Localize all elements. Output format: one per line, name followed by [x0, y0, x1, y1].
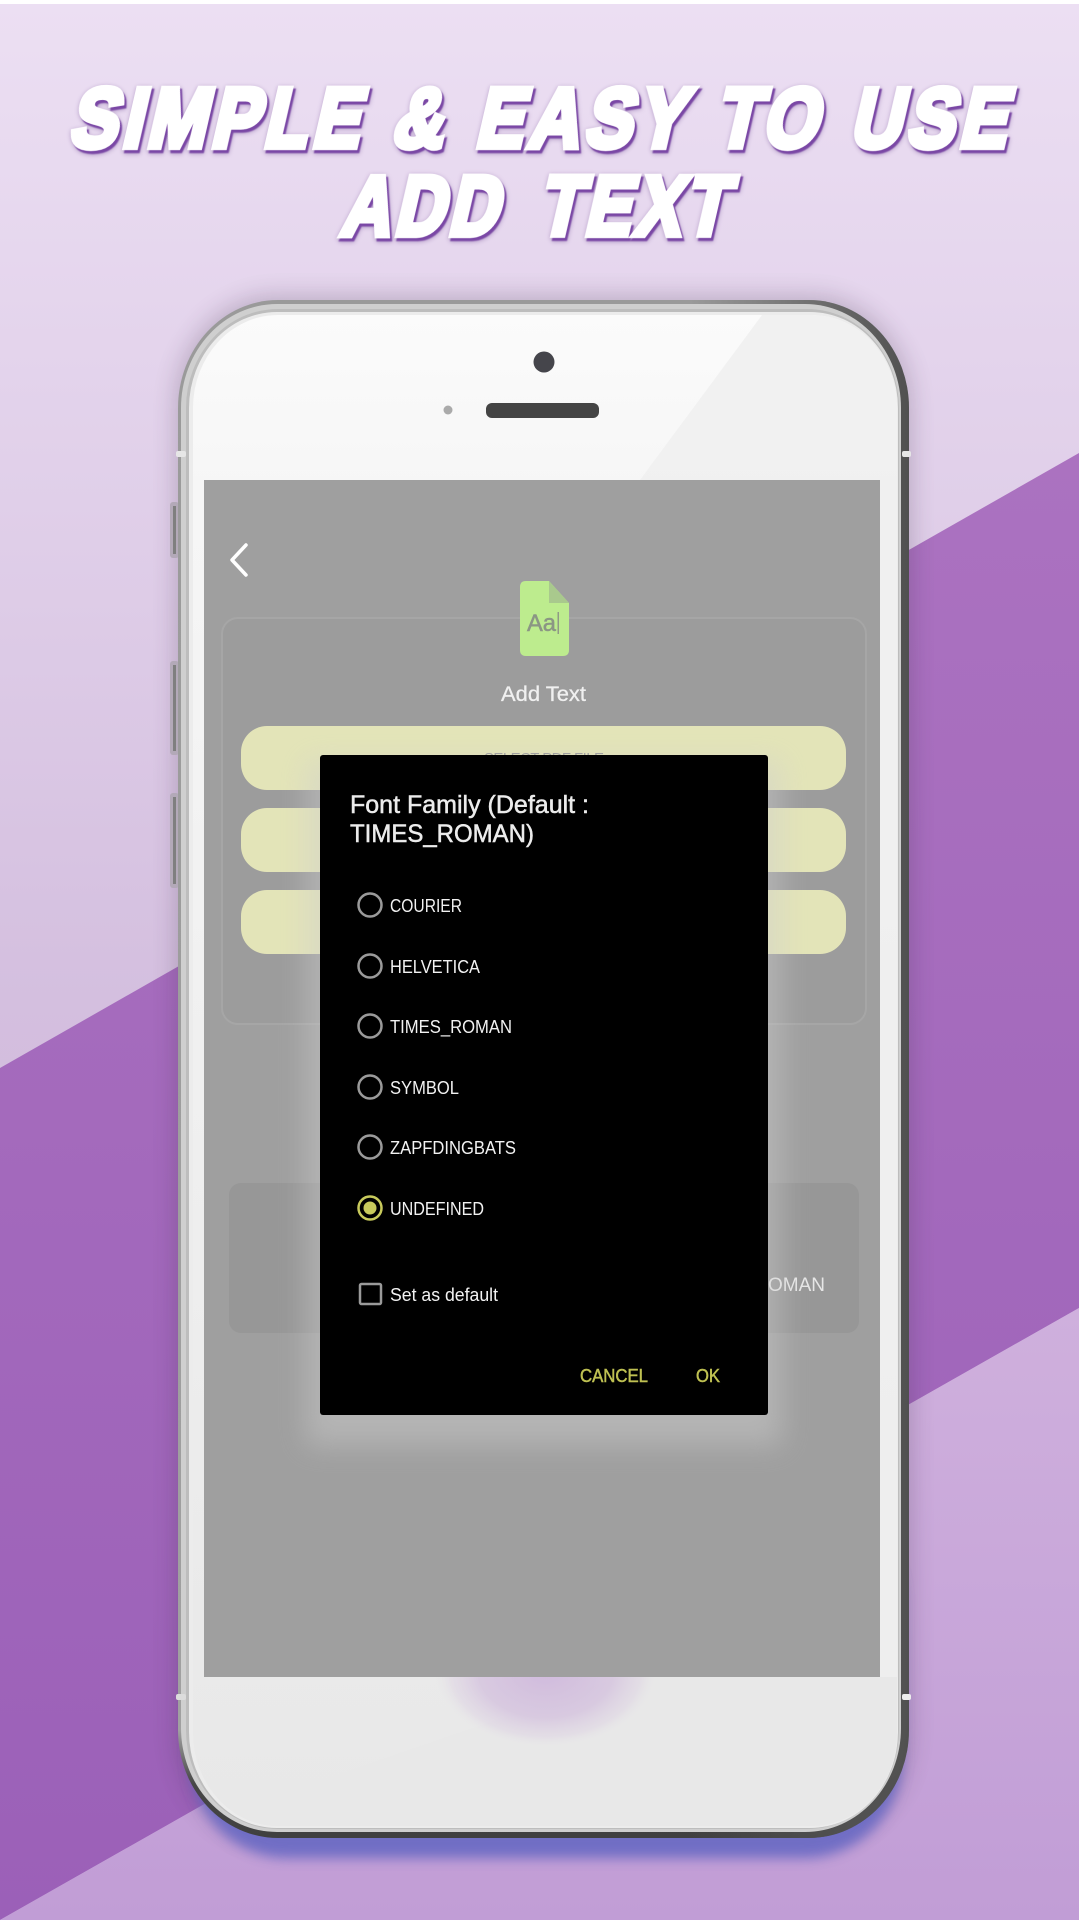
- side buttons: [170, 502, 179, 888]
- dialog heading: TIMES_ROMAN): [350, 820, 534, 848]
- button: ok: OK: [696, 1366, 720, 1386]
- speaker: [486, 403, 599, 418]
- phone frame: [176, 300, 911, 1838]
- panel: add text card: [241, 726, 846, 954]
- phone shadow: [176, 296, 911, 1858]
- option: undefined selected: [358, 1196, 484, 1220]
- panel: default font card: [769, 1278, 824, 1291]
- option: courier: [358, 894, 462, 916]
- dialog heading: [350, 791, 589, 848]
- panel: default font card: TIMES_ROMAN: [686, 1275, 825, 1296]
- sensor: [444, 406, 452, 414]
- option: undefined selected: UNDEFINED: [390, 1199, 484, 1219]
- button: select pdf file: SELECT PDF FILE: [484, 750, 604, 767]
- button: select pdf file: [241, 726, 846, 790]
- option: times roman: TIMES_ROMAN: [390, 1017, 512, 1038]
- option: symbol: SYMBOL: [390, 1078, 459, 1098]
- title: ADD TEXT: [335, 160, 747, 254]
- title: [64, 72, 1027, 254]
- button: second: [241, 808, 846, 872]
- checkbox: set as default: Set as default: [390, 1285, 498, 1305]
- option: times roman: [358, 1014, 512, 1038]
- home button smudge: [434, 1596, 658, 1748]
- option: zapfdingbats: ZAPFDINGBATS: [390, 1138, 516, 1158]
- option: zapfdingbats: [358, 1136, 516, 1158]
- dialog: font family: [320, 755, 768, 1415]
- phone screen: [204, 480, 880, 1677]
- dialog glow: [306, 760, 782, 1445]
- back arrow: [232, 545, 246, 575]
- option: symbol: [358, 1076, 459, 1098]
- option: courier: COURIER: [390, 896, 462, 916]
- camera: [534, 352, 554, 372]
- option: helvetica: HELVETICA: [390, 957, 480, 977]
- button: cancel: CANCEL: [580, 1366, 648, 1386]
- phone: [170, 296, 911, 1858]
- button: third: [241, 890, 846, 954]
- label: add text: Add Text: [501, 683, 586, 706]
- icon: text document: Aa: [527, 610, 557, 637]
- dialog heading: Font Family (Default :: [350, 791, 589, 819]
- option: helvetica: [358, 954, 480, 978]
- icon: text document: [520, 581, 569, 656]
